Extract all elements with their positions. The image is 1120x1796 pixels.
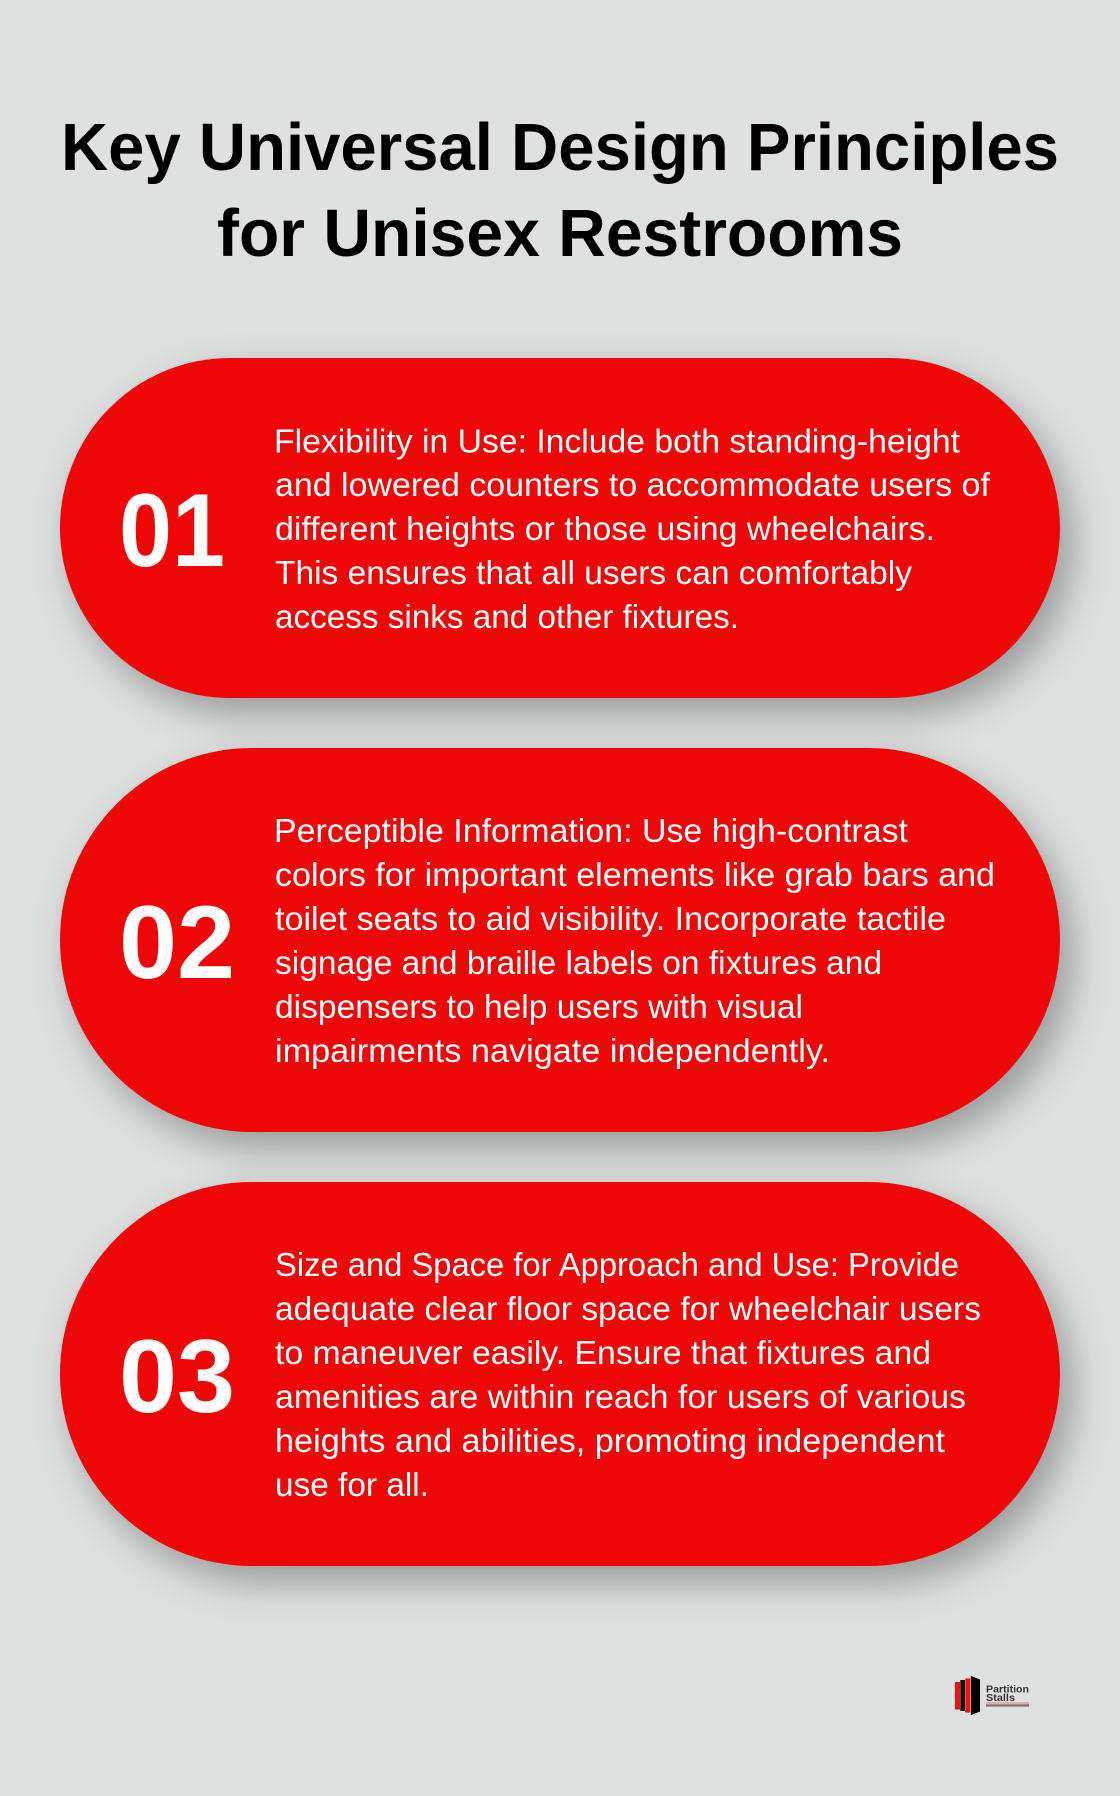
panel: principle 01 flexibility in use bbox=[60, 358, 1060, 698]
text block: perceptible information bbox=[274, 812, 995, 1069]
text block: flexibility in use: access sinks and other fixtures. bbox=[275, 598, 739, 635]
text block: size and space: amenities are within reach for users of various bbox=[275, 1378, 966, 1415]
text block: perceptible information: dispensers to help users with visual bbox=[275, 988, 803, 1025]
text block: size and space: Size and Space for Approach and Use: Provide bbox=[275, 1246, 959, 1283]
text block: size and space: to maneuver easily. Ensure that fixtures and bbox=[275, 1334, 931, 1371]
logo wordmark: Stalls bbox=[986, 1692, 1015, 1704]
number 02: 02 bbox=[119, 885, 235, 1001]
logo wordmark: Partition bbox=[986, 1684, 1029, 1696]
logo: Partition Stalls bbox=[955, 1676, 1029, 1715]
text block: flexibility in use: Flexibility in Use: Include both standing-height bbox=[274, 422, 960, 460]
text block: size and space: use for all. bbox=[275, 1466, 429, 1503]
text block: size and space: heights and abilities, promoting independent bbox=[275, 1422, 945, 1459]
text block: flexibility in use: and lowered counters to accommodate users of bbox=[275, 466, 991, 503]
title: Key Universal Design Principles bbox=[61, 110, 1059, 185]
text block: flexibility in use bbox=[274, 422, 991, 635]
panel: principle 02 perceptible information bbox=[60, 748, 1060, 1132]
text block: perceptible information: colors for important elements like grab bars and bbox=[275, 856, 995, 893]
text block: flexibility in use: different heights or those using wheelchairs. bbox=[275, 510, 935, 547]
number 01: 01 bbox=[119, 473, 225, 589]
title bbox=[61, 110, 1059, 271]
text block: flexibility in use: This ensures that all users can comfortably bbox=[275, 554, 913, 591]
text block: perceptible information: toilet seats to aid visibility. Incorporate tactile bbox=[275, 900, 946, 937]
number 03: 03 bbox=[119, 1319, 235, 1435]
text block: size and space: adequate clear floor space for wheelchair users bbox=[275, 1290, 981, 1327]
logo wordmark bbox=[986, 1684, 1029, 1707]
panel: principle 03 size and space bbox=[60, 1182, 1060, 1566]
text block: perceptible information: impairments navigate independently. bbox=[275, 1032, 830, 1069]
text block: perceptible information: signage and braille labels on fixtures and bbox=[275, 944, 882, 981]
title: for Unisex Restrooms bbox=[217, 196, 903, 271]
text block: perceptible information: Perceptible Information: Use high-contrast bbox=[274, 812, 908, 849]
text block: size and space bbox=[275, 1246, 981, 1503]
icon: partition bars bbox=[955, 1676, 980, 1715]
